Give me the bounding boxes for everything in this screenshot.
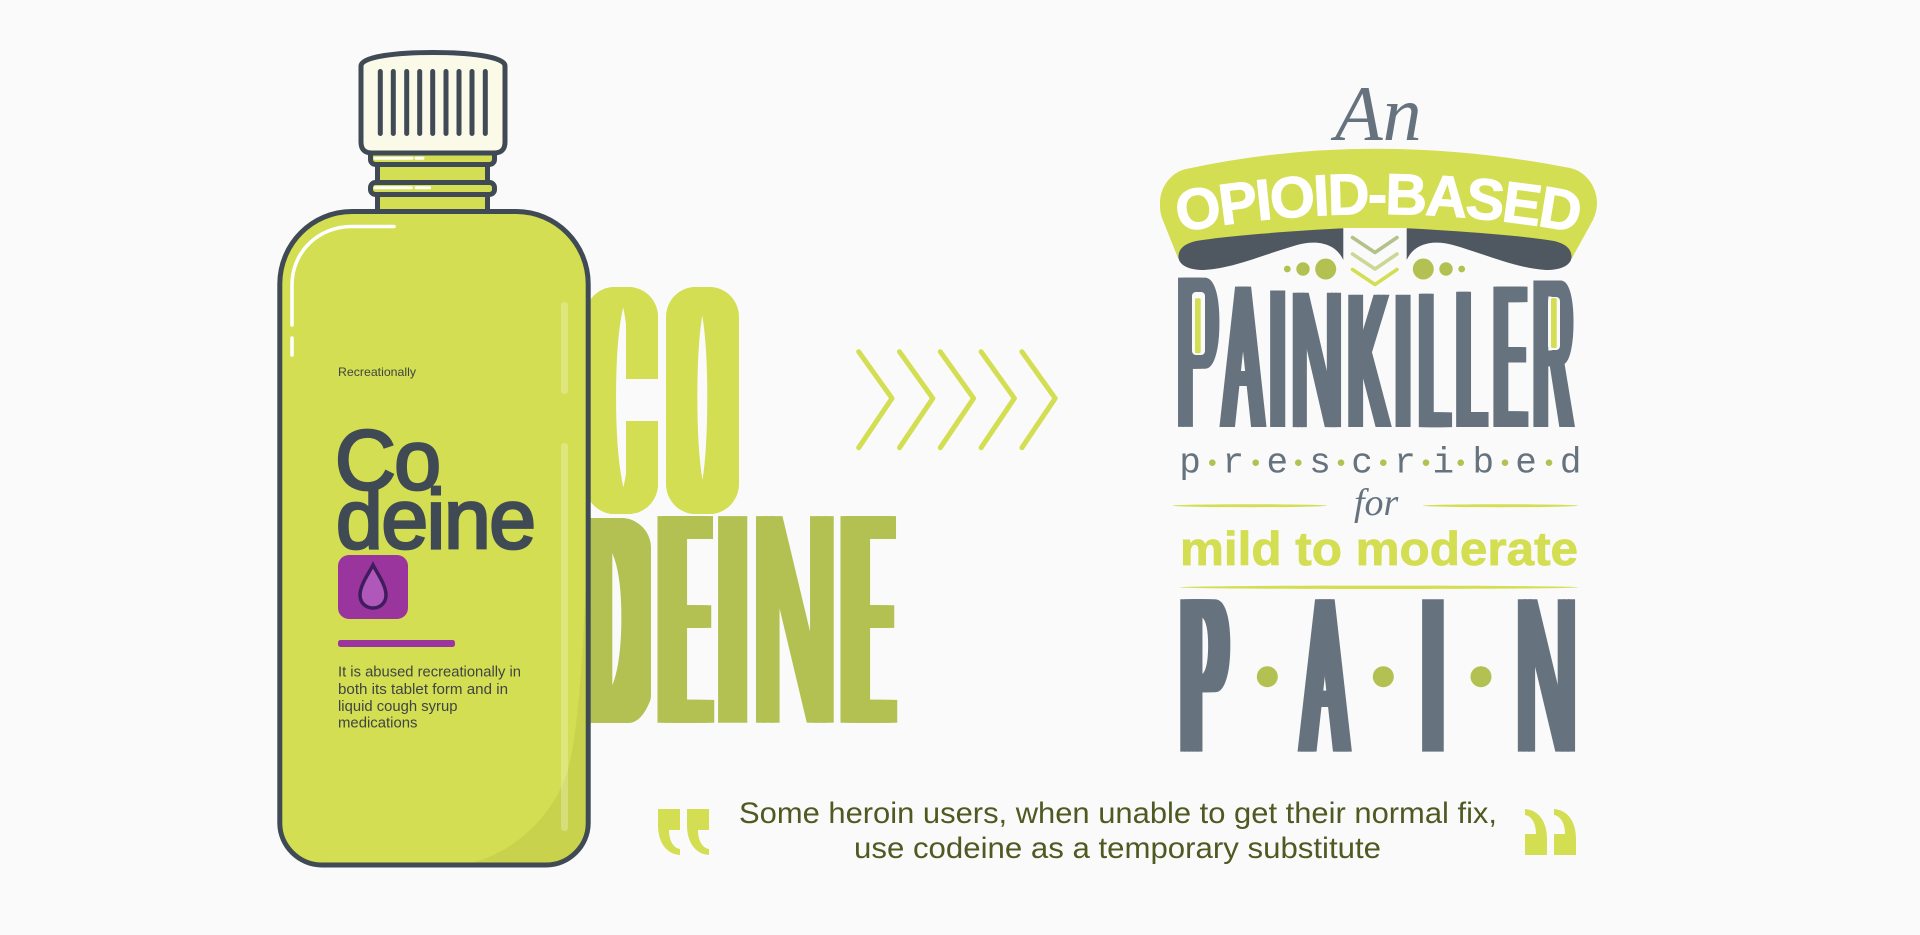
liquid shadow — [473, 590, 586, 862]
prescribed dots — [1209, 459, 1552, 466]
label: description: medications — [338, 716, 418, 732]
quote block — [658, 800, 1576, 865]
arrows: five chevrons — [856, 349, 1058, 450]
word: PAINKILLER: E — [1495, 243, 1525, 472]
heading: An + banner: OPIOID-BASED — [1177, 174, 1580, 230]
script: for: for — [1354, 482, 1399, 524]
word: P A I N: I — [1401, 552, 1465, 800]
neck collar lower — [370, 182, 494, 194]
letters: DEINE: E — [848, 452, 888, 789]
prescribed, lines, for, mild to moderate — [1172, 292, 1582, 589]
icon: closing quote — [1525, 809, 1576, 855]
label: description: liquid cough syrup — [338, 699, 458, 715]
label: recreationally: Recreationally — [338, 365, 416, 379]
bottle outline — [280, 212, 588, 865]
label: Co deine — [335, 413, 536, 566]
label: description: It is abused recreationally in — [338, 665, 521, 681]
body highlight — [292, 226, 394, 355]
label: description: both its tablet form and in — [338, 682, 508, 698]
bottle illustration — [277, 50, 591, 868]
text: prescribed: prescribed — [1179, 443, 1582, 484]
word: PAINKILLER: L — [1457, 250, 1485, 470]
icon: drop — [338, 555, 408, 619]
label: Co deine: deine — [336, 472, 536, 566]
tapered rules — [1173, 504, 1578, 589]
quote text: use codeine as a temporary substitute — [854, 832, 1381, 865]
word: PAINKILLER — [1178, 232, 1575, 475]
bottle body — [280, 212, 588, 865]
word: P A I N — [1180, 552, 1577, 800]
letters: DEINE: I — [689, 452, 776, 789]
icon: opening quote — [658, 809, 709, 855]
text: mild to moderate: mild to moderate — [1180, 522, 1578, 575]
word: PAINKILLER: I — [1255, 248, 1300, 471]
letters: CO — [589, 287, 739, 514]
letters: DEINE — [582, 452, 898, 789]
label: description — [338, 665, 521, 732]
word: PAINKILLER: P — [1178, 232, 1218, 475]
word: PAINKILLER: R — [1534, 235, 1572, 474]
big word: CODEINE — [582, 287, 898, 789]
moustache swashes — [1178, 228, 1572, 270]
PAIN dots — [1256, 666, 1492, 688]
word: PAINKILLER: L — [1420, 253, 1449, 470]
script: An: An — [1330, 70, 1422, 157]
quote text — [739, 797, 1497, 865]
bottle cap — [361, 52, 505, 153]
counter inlays — [1192, 292, 1560, 355]
collar highlights — [375, 158, 430, 188]
glass reflections — [561, 302, 568, 831]
neck collar upper — [370, 150, 494, 164]
word: P A I N: N — [1516, 552, 1577, 800]
banner — [1160, 149, 1597, 258]
word: PAINKILLER: K — [1348, 254, 1388, 469]
letters: DEINE: E — [664, 452, 705, 789]
banner text — [1170, 214, 1585, 234]
letters: DEINE: N — [754, 452, 836, 789]
heading: An + banner — [1160, 70, 1597, 286]
word: P A I N: P — [1183, 552, 1226, 800]
down chevrons — [1352, 238, 1397, 284]
word: P A I N: A — [1304, 552, 1346, 800]
word: PAINKILLER: A — [1224, 243, 1262, 472]
label: Co deine: Co — [335, 413, 441, 507]
dots — [1284, 258, 1465, 280]
word: PAINKILLER: N — [1291, 251, 1343, 470]
word: PAINKILLER: I — [1381, 254, 1425, 469]
purple rule — [338, 640, 455, 647]
bottle neck — [378, 158, 488, 216]
